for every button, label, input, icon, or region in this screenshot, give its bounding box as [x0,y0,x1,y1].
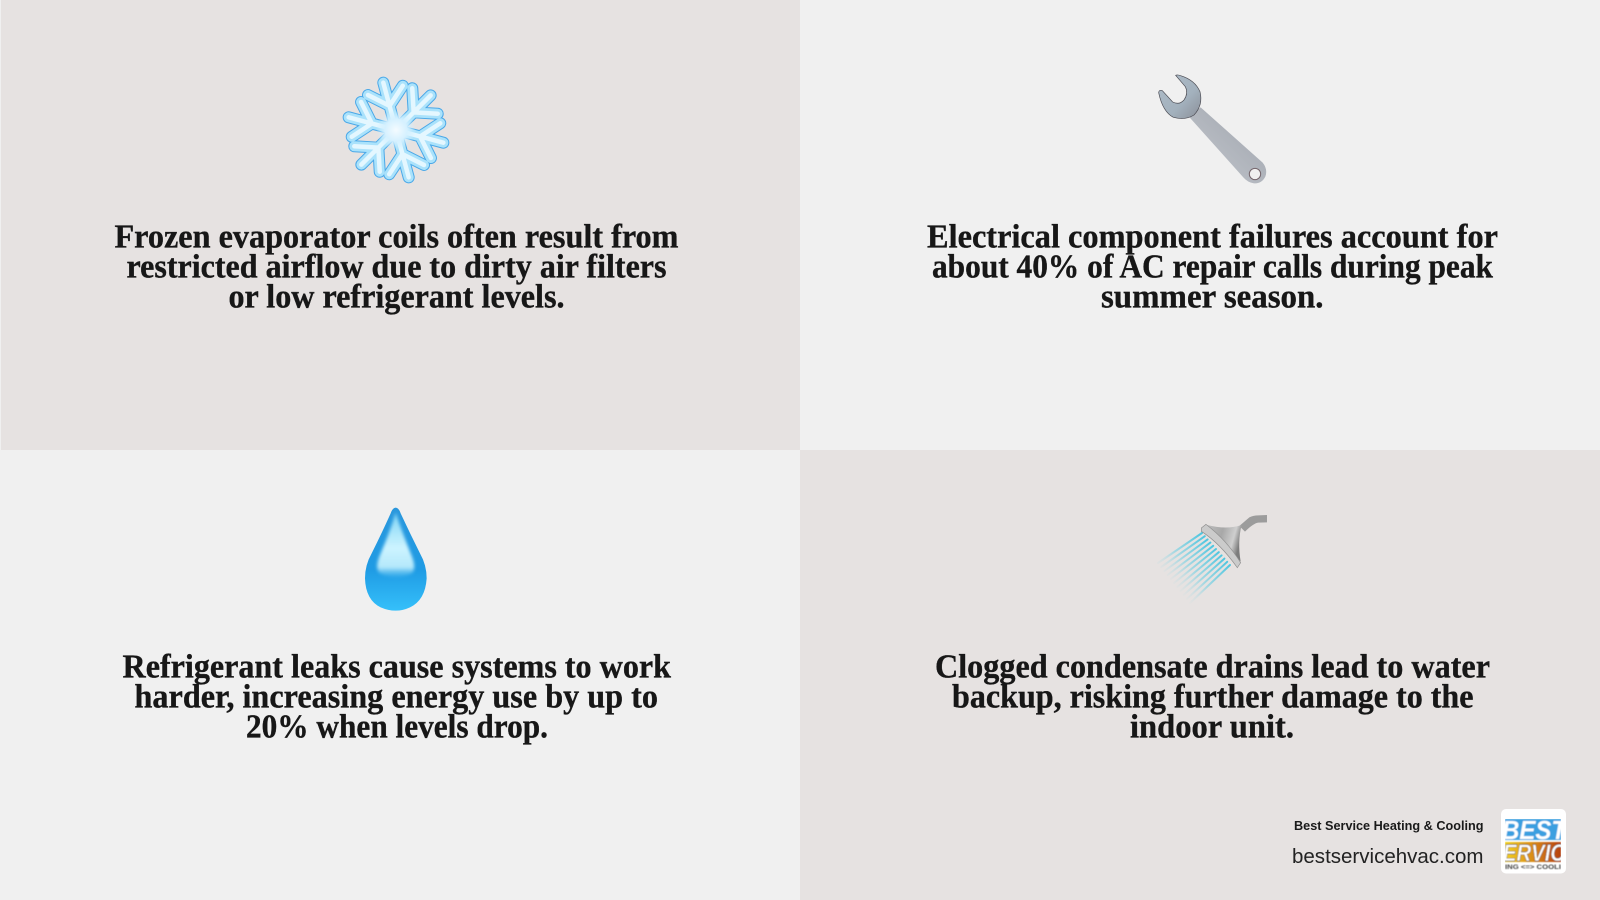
text: clogged drains: indoor unit. [1130,708,1294,746]
text: electrical failures: about 40% of AC repair calls during peak [932,248,1493,286]
text: frozen coils [114,218,679,316]
text: frozen coils: Frozen evaporator coils often result from [114,218,679,256]
text: clogged drains: backup, risking further damage to the [952,678,1474,716]
footer: website: bestservicehvac.com [1292,846,1484,868]
icon: snowflake [344,78,448,182]
text: refrigerant leaks: harder, increasing energy use by up to [134,678,658,716]
logo: ERVIC [1503,840,1566,867]
panel: clogged drains [800,450,1600,900]
text: electrical failures: Electrical component failures account for [927,218,1498,256]
text: refrigerant leaks [122,648,671,746]
icon: water drop [365,508,427,611]
text: frozen coils: restricted airflow due to dirty air filters [126,248,666,286]
text: clogged drains [935,648,1490,746]
logo: ING <=> COOLI [1505,864,1561,871]
icon: shower head [1158,515,1267,603]
panel: frozen coils [1,0,800,450]
text: clogged drains: Clogged condensate drains lead to water [935,648,1490,686]
text: refrigerant leaks: Refrigerant leaks cause systems to work [122,648,671,686]
text: frozen coils: or low refrigerant levels. [228,278,564,316]
logo: BEST [1502,815,1568,845]
panel: refrigerant leaks [0,450,800,900]
text: refrigerant leaks: 20% when levels drop. [246,708,548,746]
panel: electrical failures [800,0,1600,450]
text: electrical failures [927,218,1498,316]
footer: company name: Best Service Heating & Cooling [1294,818,1484,833]
water jets [1158,533,1230,603]
text: electrical failures: summer season. [1101,278,1324,316]
logo [1501,809,1568,874]
icon: wrench [1159,75,1266,183]
